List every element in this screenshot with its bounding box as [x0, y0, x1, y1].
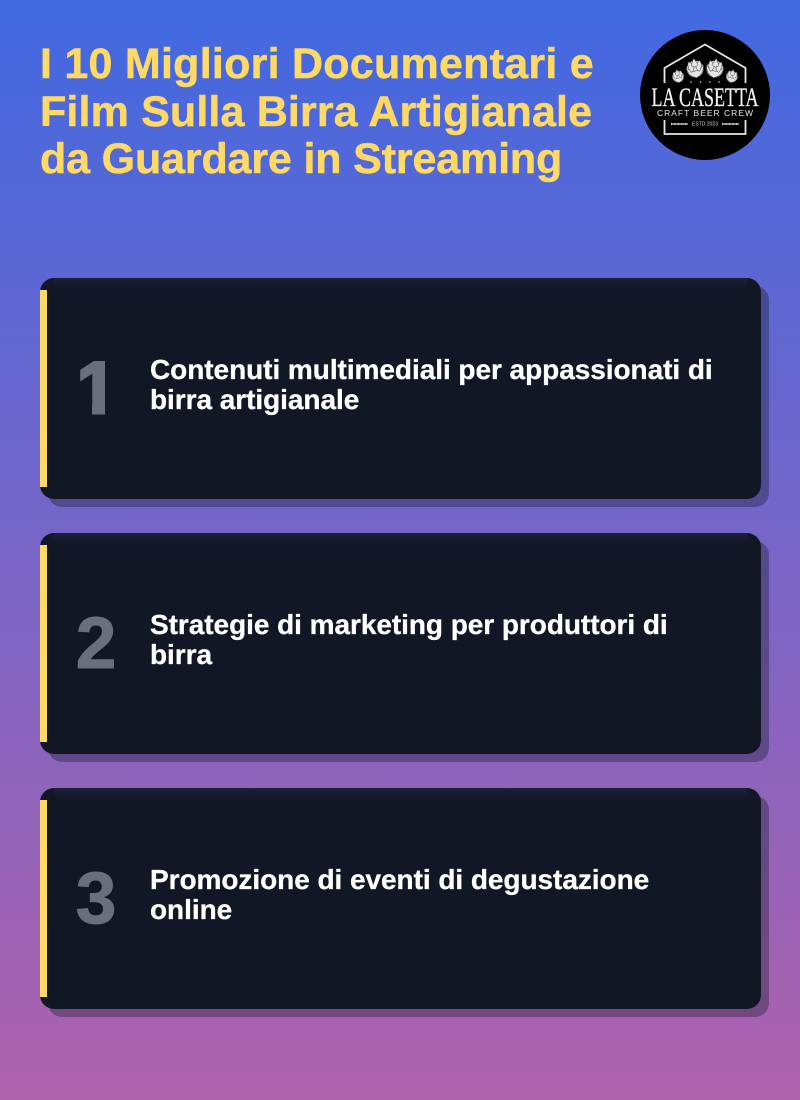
number 3: 3: [76, 858, 116, 939]
title: Film Sulla Birra Artigianale: [40, 88, 592, 136]
card 1: [40, 278, 761, 499]
card 1 text: Contenuti multimediali per appassionati di: [150, 354, 713, 385]
title: da Guardare in Streaming: [40, 135, 562, 183]
title: [40, 40, 594, 183]
card 1 text: [150, 354, 713, 416]
card 2: [40, 533, 761, 754]
title: I 10 Migliori Documentari e: [40, 40, 594, 88]
logo: La Casetta Craft Beer Crew: CRAFT BEER CREW: [657, 108, 753, 118]
card 1 text: birra artigianale: [150, 384, 359, 415]
logo: La Casetta Craft Beer Crew: [640, 30, 770, 160]
card 3 text: [150, 864, 649, 925]
number 1: 1: [77, 348, 117, 429]
card 2 text: birra: [150, 639, 212, 670]
card 2 text: [150, 609, 668, 670]
card 3 text: online: [150, 894, 232, 925]
card 3 text: Promozione di eventi di degustazione: [150, 864, 649, 895]
logo: La Casetta Craft Beer Crew: ESTD 2023: [692, 122, 718, 128]
number 2: 2: [76, 603, 116, 684]
card 2 text: Strategie di marketing per produttori di: [150, 609, 668, 640]
card 3: [40, 788, 761, 1009]
